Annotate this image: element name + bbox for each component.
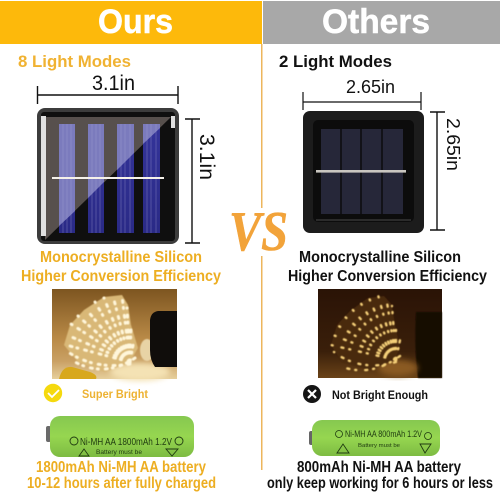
dimension: others height: 2.65in [443, 118, 463, 171]
dimension: ours height: 3.1in [195, 134, 218, 180]
photo: others string lights [318, 289, 442, 378]
solar panel: ours [37, 108, 179, 244]
battery: ours: Ni-MH AA 1800mAh 1.2V [80, 436, 172, 448]
text block: ours efficiency: Monocrystalline Silicon [40, 249, 202, 266]
solar panel: others [303, 111, 424, 233]
VS badge: VS [229, 201, 288, 263]
text block: others efficiency: Monocrystalline Silicon [299, 249, 461, 266]
label: Super Bright: Super Bright [82, 389, 148, 401]
battery: others [309, 420, 440, 456]
label: Not Bright Enough: Not Bright Enough [332, 390, 428, 402]
icon: cross [303, 385, 321, 403]
caption: ours battery: 10-12 hours after fully charged [27, 475, 216, 492]
dimension: others width: 2.65in [346, 77, 395, 97]
text block: others efficiency [288, 249, 487, 285]
text block: ours efficiency [21, 249, 221, 285]
solar cells [59, 124, 160, 233]
dimension: ours height [185, 119, 218, 243]
icon: check [44, 384, 62, 402]
battery: ours [46, 416, 194, 457]
caption: ours battery [27, 459, 216, 492]
text block: ours efficiency: Higher Conversion Efficiency [21, 268, 221, 285]
battery: others: Battery must be [358, 443, 400, 449]
caption: others battery [267, 459, 493, 492]
caption: others battery: 800mAh Ni-MH AA battery [297, 459, 461, 476]
dimension: ours width [37, 72, 178, 104]
center divider [261, 44, 262, 470]
caption: ours battery: 1800mAh Ni-MH AA battery [36, 459, 206, 476]
battery: others: Ni-MH AA 800mAh 1.2V [345, 429, 422, 439]
header: Ours [0, 1, 262, 44]
heading: 2 Light Modes: 2 Light Modes [279, 52, 392, 71]
heading: 8 Light Modes: 8 Light Modes [18, 52, 131, 71]
dimension: others width [303, 77, 421, 110]
dimension: others height [430, 112, 463, 230]
header: Ours: Ours [98, 3, 173, 41]
header: Others [263, 1, 500, 44]
dimension: ours width: 3.1in [92, 72, 135, 95]
battery: ours: Battery must be [96, 450, 143, 456]
photo: ours string lights [52, 289, 177, 381]
header: Others: Others [322, 3, 430, 41]
